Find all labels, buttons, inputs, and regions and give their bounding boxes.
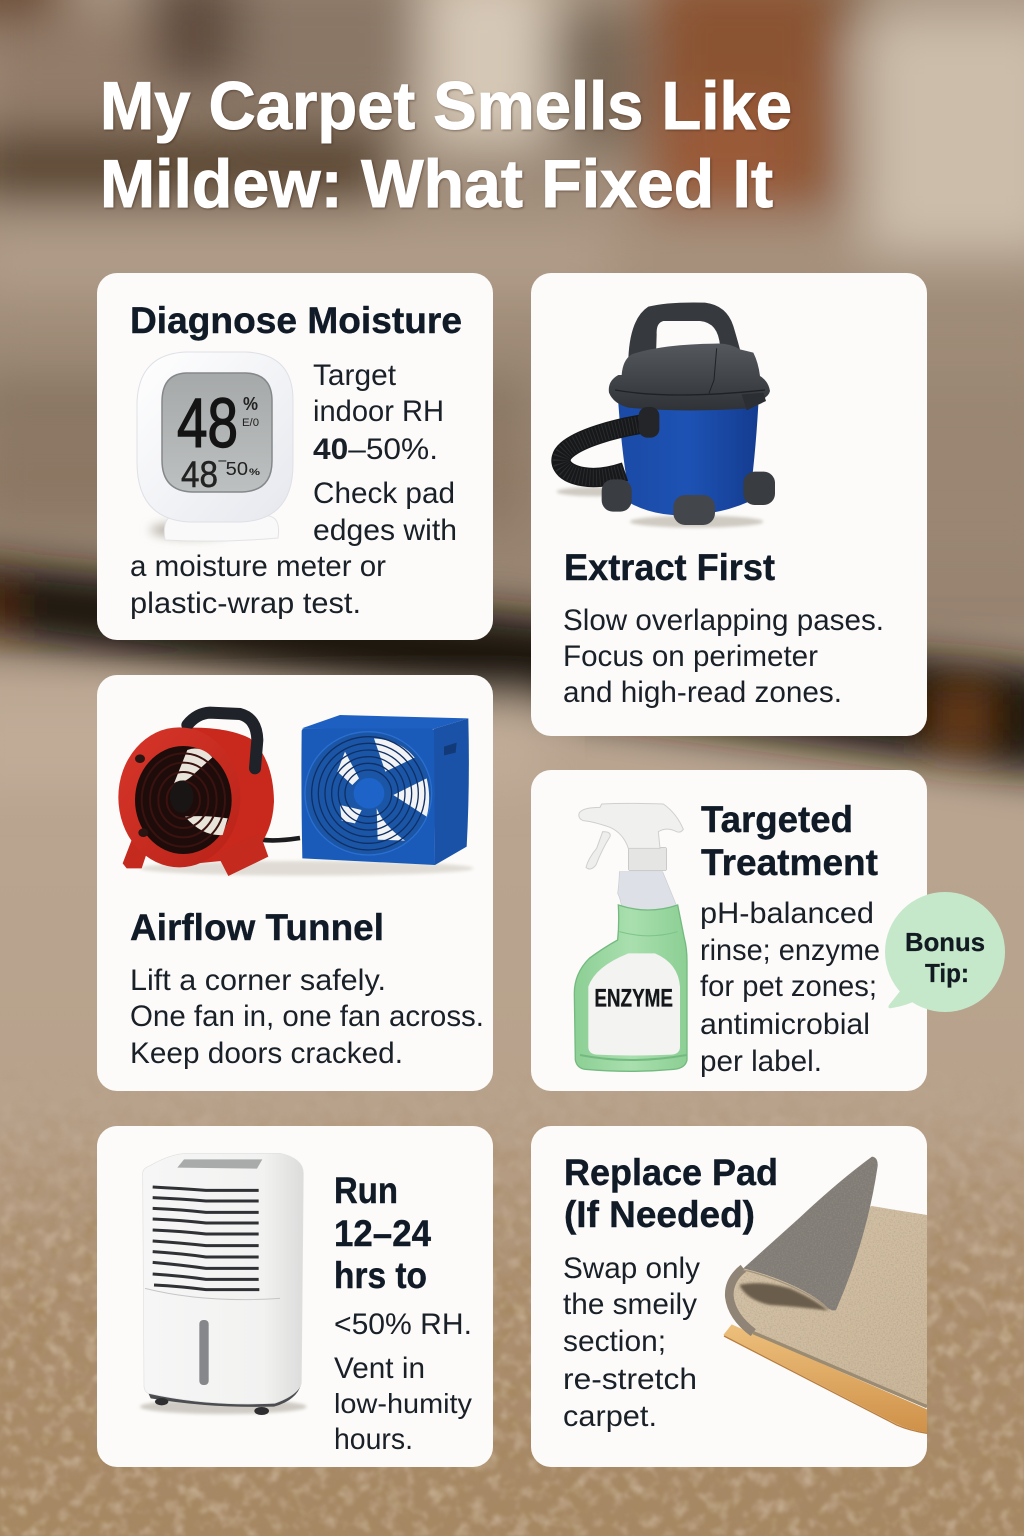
body text: targeted treatment: rinse; enzyme — [700, 934, 880, 967]
body text: diagnose moisture: plastic-wrap test. — [130, 587, 361, 620]
body text: replace pad: re-stretch — [563, 1363, 697, 1396]
body text: targeted treatment: antimicrobial — [700, 1008, 870, 1041]
icon: digital hygrometer: ‾50 — [218, 459, 248, 479]
icon: enzyme spray bottle: ENZYME — [594, 985, 673, 1013]
heading: targeted treatment: Targeted — [701, 799, 853, 840]
body text: airflow tunnel: One fan in, one fan across. — [130, 1000, 484, 1033]
body text: replace pad — [563, 1252, 700, 1433]
body text: replace pad: section; — [563, 1325, 666, 1358]
title — [100, 68, 792, 222]
body text: targeted treatment: pH-balanced — [700, 897, 874, 930]
title: My Carpet Smells Like — [100, 68, 792, 144]
body text: diagnose moisture: 40–50%. — [313, 433, 438, 466]
icon: blue wet vacuum — [557, 302, 775, 528]
icon: red and blue fans — [118, 713, 473, 876]
blue fan — [301, 715, 469, 865]
body text: diagnose moisture — [130, 359, 457, 620]
body text: replace pad: Swap only — [563, 1252, 700, 1285]
body text: diagnose moisture: a moisture meter or — [130, 550, 386, 583]
body text: run dehumidifier: low-humity — [334, 1388, 472, 1419]
body text: extract first — [563, 604, 884, 709]
heading: run 12-24 hrs: 12–24 — [334, 1213, 431, 1254]
body text: run dehumidifier: Vent in — [334, 1352, 425, 1385]
body text: diagnose moisture: edges with — [313, 514, 457, 547]
icon: white dehumidifier — [140, 1153, 307, 1415]
icon: digital hygrometer: % — [243, 394, 258, 414]
icon: enzyme spray bottle — [574, 803, 687, 1071]
icon: digital hygrometer: % — [249, 467, 260, 477]
heading: run 12-24 hrs — [334, 1170, 431, 1296]
body text: diagnose moisture: indoor RH — [313, 395, 444, 428]
panel: replace pad — [531, 1126, 927, 1467]
icon: digital hygrometer: E/0 — [242, 417, 259, 429]
callout: bonus tip: Bonus — [905, 927, 985, 957]
callout: bonus tip: Tip: — [925, 958, 969, 988]
heading: run 12-24 hrs: hrs to — [334, 1255, 427, 1296]
panel: run dehumidifier — [97, 1126, 493, 1467]
body text: extract first: Focus on perimeter — [563, 640, 818, 673]
icon: digital hygrometer: 48 — [181, 454, 218, 495]
body text: replace pad: the smeily — [563, 1288, 697, 1321]
heading: replace pad: (If Needed) — [564, 1194, 755, 1235]
heading: airflow tunnel: Airflow Tunnel — [130, 907, 384, 948]
body text: diagnose moisture: Target — [313, 359, 397, 392]
heading: replace pad: Replace Pad — [564, 1152, 778, 1193]
heading: diagnose moisture: Diagnose Moisture — [130, 300, 462, 341]
icon: digital hygrometer — [137, 352, 293, 541]
body text: airflow tunnel — [130, 964, 484, 1070]
heading: run 12-24 hrs: Run — [334, 1170, 398, 1211]
panel: diagnose moisture — [97, 273, 493, 640]
body text: airflow tunnel: Lift a corner safely. — [130, 964, 386, 997]
body text: extract first: and high-read zones. — [563, 676, 842, 709]
heading: targeted treatment — [701, 799, 878, 883]
heading: replace pad — [564, 1152, 778, 1235]
body text: airflow tunnel: Keep doors cracked. — [130, 1037, 403, 1070]
panel: extract first — [531, 273, 927, 736]
panel: targeted treatment — [531, 770, 927, 1091]
panel: airflow tunnel — [97, 675, 493, 1091]
body text: replace pad: carpet. — [563, 1400, 657, 1433]
body text: extract first: Slow overlapping pases. — [563, 604, 884, 637]
body text: diagnose moisture: Check pad — [313, 477, 455, 510]
icon: digital hygrometer: 48 — [177, 384, 238, 462]
body text: targeted treatment: for pet zones; — [700, 970, 877, 1003]
heading: targeted treatment: Treatment — [701, 842, 878, 883]
body text: run dehumidifier — [334, 1308, 472, 1456]
body text: targeted treatment: per label. — [700, 1045, 822, 1078]
body text: targeted treatment — [700, 897, 880, 1078]
heading: extract first: Extract First — [564, 547, 775, 588]
red fan — [118, 713, 274, 876]
icon: folded carpet and pad — [723, 1157, 927, 1433]
body text: run dehumidifier: hours. — [334, 1423, 413, 1456]
title: Mildew: What Fixed It — [100, 146, 773, 222]
callout: bonus tip — [885, 892, 1005, 1012]
body text: run dehumidifier: <50% RH. — [334, 1308, 472, 1341]
